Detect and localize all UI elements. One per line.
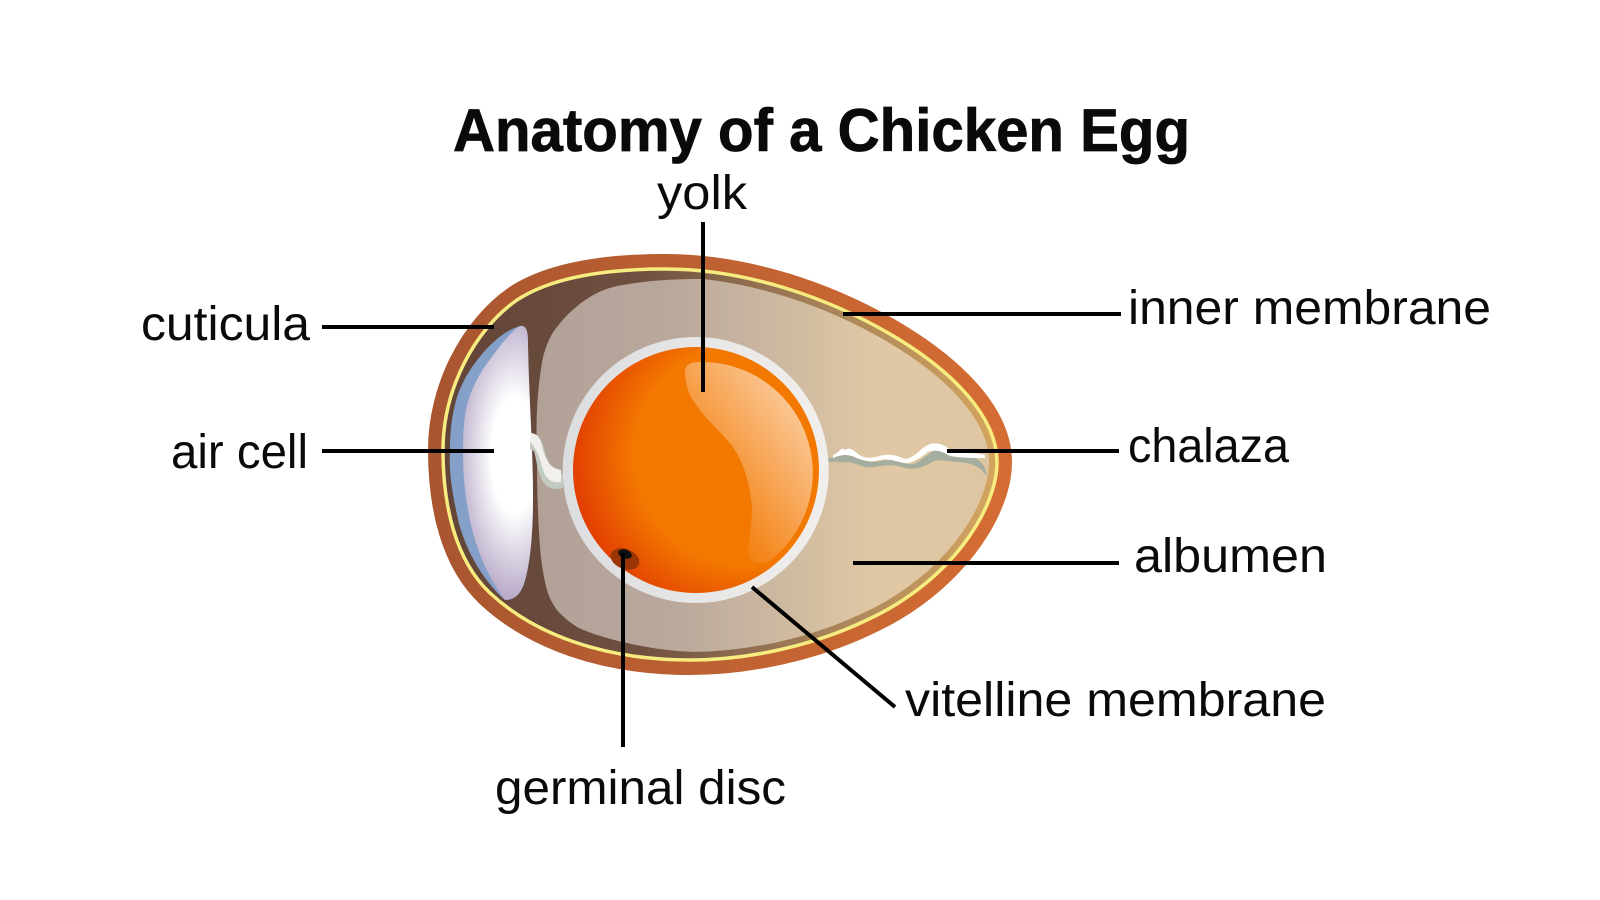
vitelline membrane	[563, 337, 829, 603]
label: yolk: yolk	[657, 167, 748, 220]
albumen	[537, 279, 1010, 662]
germinal disc	[607, 544, 643, 574]
yolk highlight	[685, 362, 813, 563]
label: vitelline membrane: vitelline membrane	[905, 674, 1326, 727]
leader lines	[322, 222, 1121, 747]
label: germinal disc: germinal disc	[495, 762, 786, 815]
title: Anatomy of a Chicken Egg	[453, 97, 1190, 164]
label: cuticula: cuticula	[141, 298, 310, 351]
egg diagram	[443, 269, 1010, 662]
label: chalaza: chalaza	[1128, 420, 1289, 473]
inner band	[692, 279, 996, 656]
label: inner membrane: inner membrane	[1128, 282, 1491, 335]
eggshell (cuticula)	[443, 269, 997, 660]
right chalaza	[828, 443, 987, 476]
label: air cell: air cell	[171, 426, 308, 479]
air cell	[450, 326, 533, 600]
yolk	[573, 347, 819, 593]
left chalaza	[530, 433, 563, 489]
label: albumen: albumen	[1134, 530, 1327, 583]
inner cavity	[443, 269, 997, 660]
inner membrane	[443, 269, 997, 660]
